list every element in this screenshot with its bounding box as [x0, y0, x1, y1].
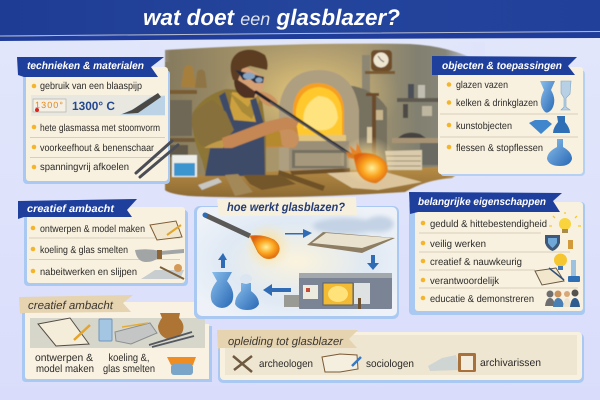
- icon: cutting tools: [141, 264, 184, 279]
- arrow: down to oven: [367, 255, 379, 270]
- glowing glass bulb: [340, 136, 396, 184]
- panel: hoe werkt glasblazen?: [194, 197, 399, 319]
- header banner: [0, 0, 600, 41]
- ribbon heading: [18, 199, 137, 219]
- icon: open book and pen: [322, 354, 361, 372]
- list items: veilig werken: [430, 239, 486, 250]
- list items: voorkeefhout & benenschaar: [40, 143, 155, 154]
- ribbon heading: [409, 192, 562, 214]
- list items: glazen vazen: [456, 80, 508, 91]
- step: annealing oven: [284, 273, 392, 309]
- furnace: [279, 70, 387, 172]
- clock: [365, 50, 395, 74]
- temperature gauge row: 1300°: [35, 100, 63, 110]
- icon: files and clipboard: [428, 353, 476, 372]
- caption: koeling &: koeling &,: [108, 352, 150, 364]
- icon: thermometer: [568, 260, 580, 282]
- arrow: back to blowpipe: [218, 253, 227, 268]
- ribbon heading: [432, 56, 577, 75]
- icon: melting pan: [135, 249, 184, 262]
- icon: sketch notebook: [38, 318, 90, 346]
- step: blowpipe with glowing glass: [202, 212, 292, 270]
- central scene: glassblower at the furnace: [165, 40, 480, 197]
- list items: kunstobjecten: [456, 121, 512, 132]
- tan ribbon heading: [19, 295, 133, 314]
- icon: long tongs: [149, 332, 194, 347]
- arrow: to finished glass: [263, 284, 291, 296]
- apron: [205, 92, 265, 176]
- icon: tongs: [136, 141, 178, 177]
- caption: glas smelten: glas smelten: [103, 363, 155, 375]
- icon: goblet: [561, 81, 571, 110]
- temperature gauge row: 1300° C: [72, 99, 115, 113]
- scene edge fades: [140, 42, 485, 178]
- label: sociologen: sociologen: [366, 358, 414, 370]
- list items: [440, 80, 578, 154]
- scene left wall shelves: [165, 65, 207, 157]
- tan ribbon heading: [217, 330, 358, 349]
- ribbon heading: objecten & toepassingen: [442, 60, 562, 72]
- panel: opleiding tot glasblazer: [217, 330, 584, 383]
- list items: verantwoordelijk: [430, 276, 500, 287]
- list items: hete glasmassa met stoomvorm: [40, 123, 160, 134]
- label: [217, 197, 357, 216]
- list items: kelken & drinkglazen: [456, 98, 538, 109]
- panel: creatief ambacht (blue): [18, 199, 188, 286]
- list items: [29, 224, 180, 278]
- arrow: to mold: [285, 229, 312, 238]
- icon: clay pot: [158, 313, 183, 339]
- ribbon heading: technieken & materialen: [27, 60, 144, 72]
- panel: belangrijke eigenschappen: [409, 192, 585, 315]
- icon: clipboard: [535, 268, 564, 285]
- icon: blue glass block: [99, 319, 112, 341]
- icon: notebook and pencil: [150, 221, 182, 240]
- list items: spanningvrij afkoelen: [40, 162, 129, 173]
- icon: group of people: [545, 290, 580, 307]
- icon: round flask: [547, 139, 572, 166]
- glassblower figure: [192, 50, 299, 176]
- icon: crossed trowel and tools: [233, 356, 252, 372]
- workbench planks: [198, 150, 422, 196]
- front arm: [192, 100, 234, 146]
- back arm: [262, 127, 299, 148]
- icon: shield: [545, 235, 573, 251]
- ribbon heading: [17, 57, 164, 77]
- head: [236, 66, 265, 97]
- panel: creatief ambacht (tan): [19, 295, 212, 382]
- list items: geduld & hittebestendigheid: [430, 219, 547, 230]
- icon: idea bulb: [554, 254, 567, 270]
- step: finished blue vase and bottle: [211, 272, 259, 310]
- label: archeologen: archeologen: [259, 358, 313, 370]
- list items: koeling & glas smelten: [40, 245, 128, 256]
- list items: [30, 81, 165, 173]
- list items: creatief & nauwkeurig: [430, 257, 522, 268]
- raised hand: [258, 91, 278, 106]
- list items: gebruik van een blaaspijp: [40, 81, 142, 92]
- blowpipe: [256, 92, 354, 157]
- list items: flessen & stopflessen: [456, 143, 543, 154]
- tan ribbon heading: opleiding tot glasblazer: [228, 336, 344, 348]
- caption: model maken: model maken: [36, 363, 94, 375]
- table: [165, 165, 470, 197]
- icon: metal tray: [115, 323, 157, 344]
- ribbon heading: belangrijke eigenschappen: [418, 196, 546, 208]
- list items: ontwerpen & model maken: [40, 224, 145, 235]
- scene strip of tools: [30, 313, 205, 348]
- scene right wall: shelves and bottles: [362, 55, 445, 165]
- title: wat doet een glasblazer?: [143, 5, 400, 30]
- torso shirt: [192, 89, 266, 176]
- caption: ontwerpen &: ontwerpen &: [35, 352, 93, 364]
- list items: nabeitwerken en slijpen: [40, 267, 137, 278]
- list items: [419, 219, 578, 305]
- panel: technieken & materialen: [17, 57, 178, 184]
- icon: diamond: [529, 120, 552, 134]
- label: hoe werkt glasblazen?: [227, 200, 346, 214]
- icon: glowing light bulb: [549, 212, 581, 233]
- list items: educatie & demonstreren: [430, 294, 534, 305]
- temperature gauge row: [31, 93, 165, 116]
- icon: small stoppered bottle: [553, 116, 570, 133]
- label: archivarissen: archivarissen: [480, 357, 541, 369]
- tan ribbon heading: creatief ambacht: [28, 300, 114, 312]
- panel: objecten & toepassingen: [432, 56, 585, 176]
- icon: blue vase: [540, 81, 555, 113]
- step: steaming mold: [307, 216, 395, 253]
- ribbon heading: creatief ambacht: [27, 203, 115, 215]
- blue jar on bench: [172, 155, 197, 177]
- icon: orange and blue tool case: [167, 357, 196, 375]
